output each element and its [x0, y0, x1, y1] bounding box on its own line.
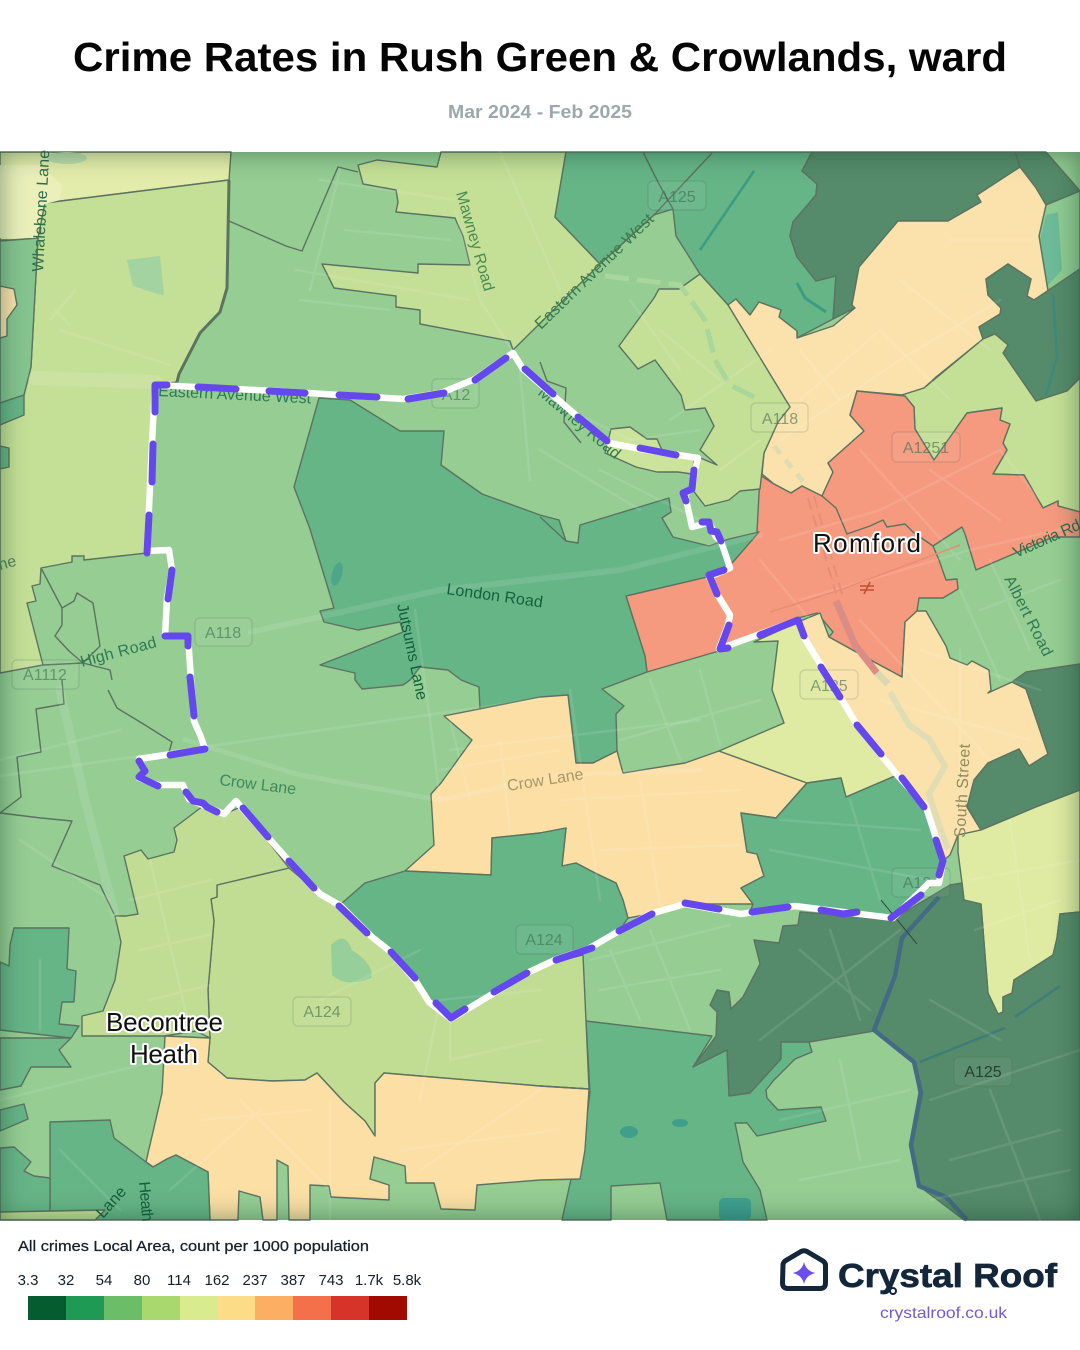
- legend panel: [18, 1239, 422, 1320]
- legend tick labels: 3.3: [18, 1272, 38, 1289]
- subtitle: date range: Mar 2024 - Feb 2025: [448, 102, 632, 122]
- label: Crow Lane west: Crow Lane: [219, 772, 297, 798]
- choropleth zones: [0, 152, 1080, 1220]
- shield: A12: A12: [442, 387, 470, 404]
- place: Becontree: Becontree: [106, 1007, 223, 1037]
- label: South Street: South Street: [952, 743, 974, 838]
- label: Whalebone Lane: Whalebone Lane: [30, 149, 53, 272]
- label: Lane fragment: Lane: [93, 1183, 130, 1222]
- legend tick labels: 32: [58, 1272, 74, 1289]
- label: Eastern Avenue West diagonal: Eastern Avenue West: [532, 211, 658, 333]
- wordmark: Crystal Roof: [838, 1257, 1058, 1294]
- legend tick labels: [18, 1272, 422, 1289]
- shield: A125 north: A125: [658, 189, 696, 206]
- shield: A12 east: [892, 868, 950, 897]
- website link: crystalroof.co.uk: [880, 1305, 1008, 1322]
- legend tick labels: 1.7k: [355, 1272, 384, 1289]
- legend tick labels: 387: [280, 1272, 306, 1289]
- label: Crow Lane east: Crow Lane: [506, 766, 585, 795]
- place: Heath: Heath: [130, 1039, 198, 1069]
- shield: A125 south: A125: [964, 1064, 1002, 1081]
- label: Jutsums Lane: Jutsums Lane: [393, 602, 430, 702]
- road name labels: [0, 149, 1080, 1222]
- shield: A118 east: A118: [762, 411, 798, 428]
- ponds and waterways: [0, 152, 1060, 1220]
- shield: A125 central: [800, 670, 858, 699]
- shield: A124 west: [293, 997, 351, 1026]
- label: Mawney Road north: Mawney Road: [452, 189, 497, 293]
- legend tick labels: 162: [204, 1272, 230, 1289]
- title: Crime Rates in Rush Green & Crowlands, ward: [73, 34, 1007, 80]
- legend colour scale: [28, 1296, 407, 1320]
- map panel: [0, 149, 1080, 1222]
- shield: A125 south: [954, 1057, 1012, 1086]
- icon: house with star: [782, 1251, 826, 1288]
- legend tick labels: 114: [167, 1272, 191, 1289]
- shield: A125 north: [648, 181, 706, 210]
- shield: A124 central: A124: [525, 932, 563, 949]
- ward boundary: Rush Green & Crowlands: [139, 353, 943, 1019]
- shield: A124 central: [516, 925, 573, 954]
- legend tick labels: 80: [134, 1272, 150, 1289]
- shield: A1251: [892, 432, 960, 462]
- shield: A124 west: A124: [303, 1004, 341, 1021]
- legend tick labels: 5.8k: [393, 1272, 422, 1289]
- label: High Road: High Road: [79, 634, 158, 671]
- river: [874, 897, 967, 1220]
- label: Eastern Avenue West on ward boundary: Eastern Avenue West: [158, 383, 312, 407]
- shield: A1112: A1112: [23, 667, 67, 684]
- shield: A118 west: [195, 618, 252, 646]
- shield: A1251: A1251: [903, 440, 949, 457]
- boundary lines: [229, 167, 358, 251]
- legend title: All crimes Local Area, count per 1000 population: [18, 1239, 369, 1255]
- shield: A118 west: A118: [205, 625, 241, 642]
- shield: A1112: [12, 660, 79, 689]
- shield: A12: [432, 379, 479, 408]
- label: Heath fragment: Heath: [135, 1181, 155, 1222]
- railway through Romford: [770, 446, 960, 684]
- shield: A125 central: A125: [810, 678, 848, 695]
- label: Albert Road: Albert Road: [1000, 573, 1056, 659]
- legend tick labels: 54: [96, 1272, 112, 1289]
- icon: railway station: [860, 582, 874, 594]
- label: Mawney Road south: Mawney Road: [534, 384, 623, 463]
- shield: A12 east: A12: [903, 875, 931, 892]
- roads: [0, 152, 1080, 1220]
- label: London Road: London Road: [445, 581, 544, 611]
- place labels: [106, 528, 921, 1069]
- legend tick labels: 237: [242, 1272, 268, 1289]
- place: Romford: Romford: [813, 528, 921, 558]
- logo: Crystal Roof: [782, 1251, 1058, 1322]
- road number shields: [12, 181, 1012, 1086]
- shield: A118 east: [751, 403, 808, 432]
- legend tick labels: 743: [318, 1272, 344, 1289]
